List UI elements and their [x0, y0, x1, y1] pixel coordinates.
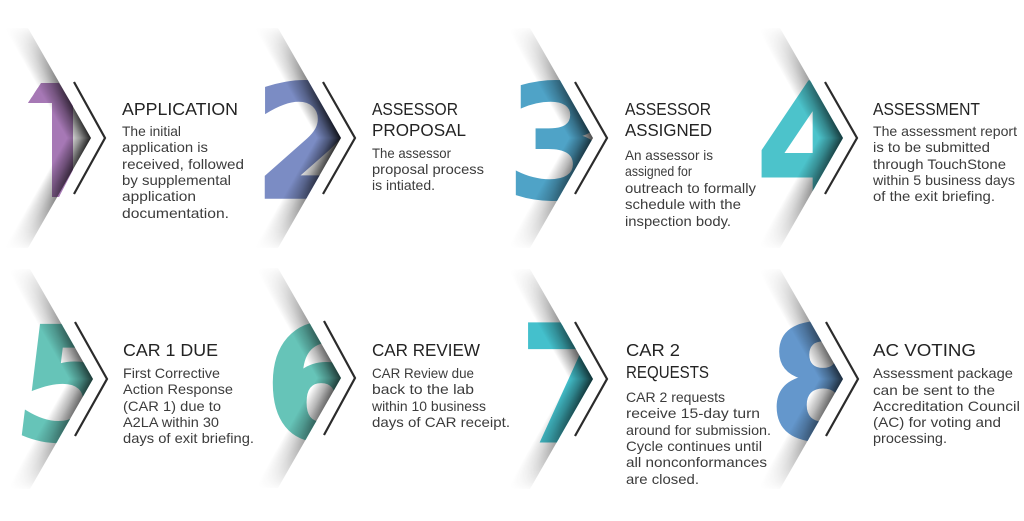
text: car 1 due: First Corrective	[123, 365, 220, 381]
text: assessment	[872, 99, 1017, 204]
text: assessor proposal: proposal process	[372, 161, 484, 177]
text: car 2 requests: CAR 2 requests	[626, 389, 725, 405]
text: car review: days of CAR receipt.	[372, 414, 510, 430]
text: assessor assigned: schedule with the	[625, 196, 741, 212]
text: assessor proposal: The assessor	[372, 145, 451, 161]
chevron with number 5	[22, 272, 108, 486]
chevron with number 3: 3	[506, 52, 616, 236]
text: car 1 due: Action Response	[123, 381, 233, 397]
text: application: received, followed	[122, 156, 244, 172]
text: car 2 requests: REQUESTS	[626, 362, 709, 382]
text: assessor assigned: outreach to formally	[625, 180, 756, 196]
text: assessor assigned: ASSESSOR	[625, 99, 711, 119]
text: car 2 requests	[626, 340, 771, 487]
chevron with number 7	[522, 272, 608, 486]
text: application: The initial	[122, 123, 181, 139]
chevron with number 2: 2	[253, 52, 363, 236]
text: assessment: through TouchStone	[873, 156, 1006, 172]
text: assessor proposal: ASSESSOR	[372, 99, 458, 119]
text: car 1 due	[123, 340, 254, 446]
text: car review	[371, 340, 510, 430]
chevron with number 8: 8	[768, 293, 878, 477]
text: car 2 requests: are closed.	[626, 471, 699, 487]
chevron with number 6	[270, 271, 356, 485]
step 4: assessment	[743, 28, 1017, 248]
text: application: application	[122, 188, 196, 204]
text: ac voting: Assessment package	[873, 365, 1013, 381]
text: car 1 due: A2LA within 30	[123, 414, 219, 430]
text: assessment: The assessment report	[873, 123, 1017, 139]
text: application: by supplemental	[122, 172, 231, 188]
text: assessor proposal: is intiated.	[372, 177, 435, 193]
text: ac voting: Accreditation Council	[873, 398, 1020, 414]
step 8: ac voting	[772, 272, 1019, 486]
step 2: assessor proposal	[264, 30, 484, 246]
text: assessment: is to be submitted	[873, 139, 990, 155]
text: ac voting: can be sent to the	[873, 382, 995, 398]
text: car review: within 10 business	[371, 398, 486, 414]
chevron with number 7: 7	[520, 294, 630, 478]
chevron with number 6: 6	[264, 293, 374, 477]
step 5: car 1 due	[22, 272, 253, 486]
text: assessor assigned: An assessor is	[625, 147, 713, 163]
chevron with number 5: 5	[5, 295, 138, 478]
text: assessor proposal	[372, 99, 484, 193]
text: car 2 requests: receive 15-day turn	[626, 405, 760, 421]
text: car review: CAR REVIEW	[372, 340, 480, 360]
text: assessor assigned: assigned for	[625, 163, 692, 179]
step 7: car 2 requests	[522, 272, 770, 486]
chevron with number 4: 4	[756, 51, 866, 235]
text: car review: back to the lab	[372, 381, 474, 397]
text: application: application is	[122, 139, 208, 155]
text: assessor proposal: PROPOSAL	[372, 120, 466, 140]
step 6: car review	[270, 271, 509, 485]
step 3: assessor assigned	[516, 31, 756, 245]
text: assessor assigned	[625, 99, 756, 229]
text: car 2 requests: CAR 2	[626, 340, 680, 360]
text: assessment: of the exit briefing.	[873, 188, 995, 204]
text: car 1 due: days of exit briefing.	[123, 430, 254, 446]
text: assessor assigned: inspection body.	[625, 213, 731, 229]
text: car 2 requests: around for submission.	[626, 422, 771, 438]
text: car 2 requests: Cycle continues until	[626, 438, 762, 454]
text: ac voting	[873, 340, 1020, 446]
text: car 1 due: CAR 1 DUE	[123, 340, 218, 360]
text: assessor assigned: ASSIGNED	[625, 120, 712, 140]
text: assessment: within 5 business days	[872, 172, 1015, 188]
text: car review: CAR Review due	[372, 365, 474, 381]
text: car 1 due: (CAR 1) due to	[123, 398, 221, 414]
text: ac voting: AC VOTING	[873, 340, 976, 360]
text: car 2 requests: all nonconformances	[626, 454, 767, 470]
text: ac voting: processing.	[873, 430, 947, 446]
step 1: application	[0, 28, 244, 248]
text: application: documentation.	[122, 205, 229, 221]
text: application: APPLICATION	[122, 99, 238, 119]
chevron with number 1: 1	[9, 54, 119, 238]
text: ac voting: (AC) for voting and	[873, 414, 1001, 430]
text: assessment: ASSESSMENT	[873, 99, 980, 119]
text: application	[122, 99, 244, 221]
